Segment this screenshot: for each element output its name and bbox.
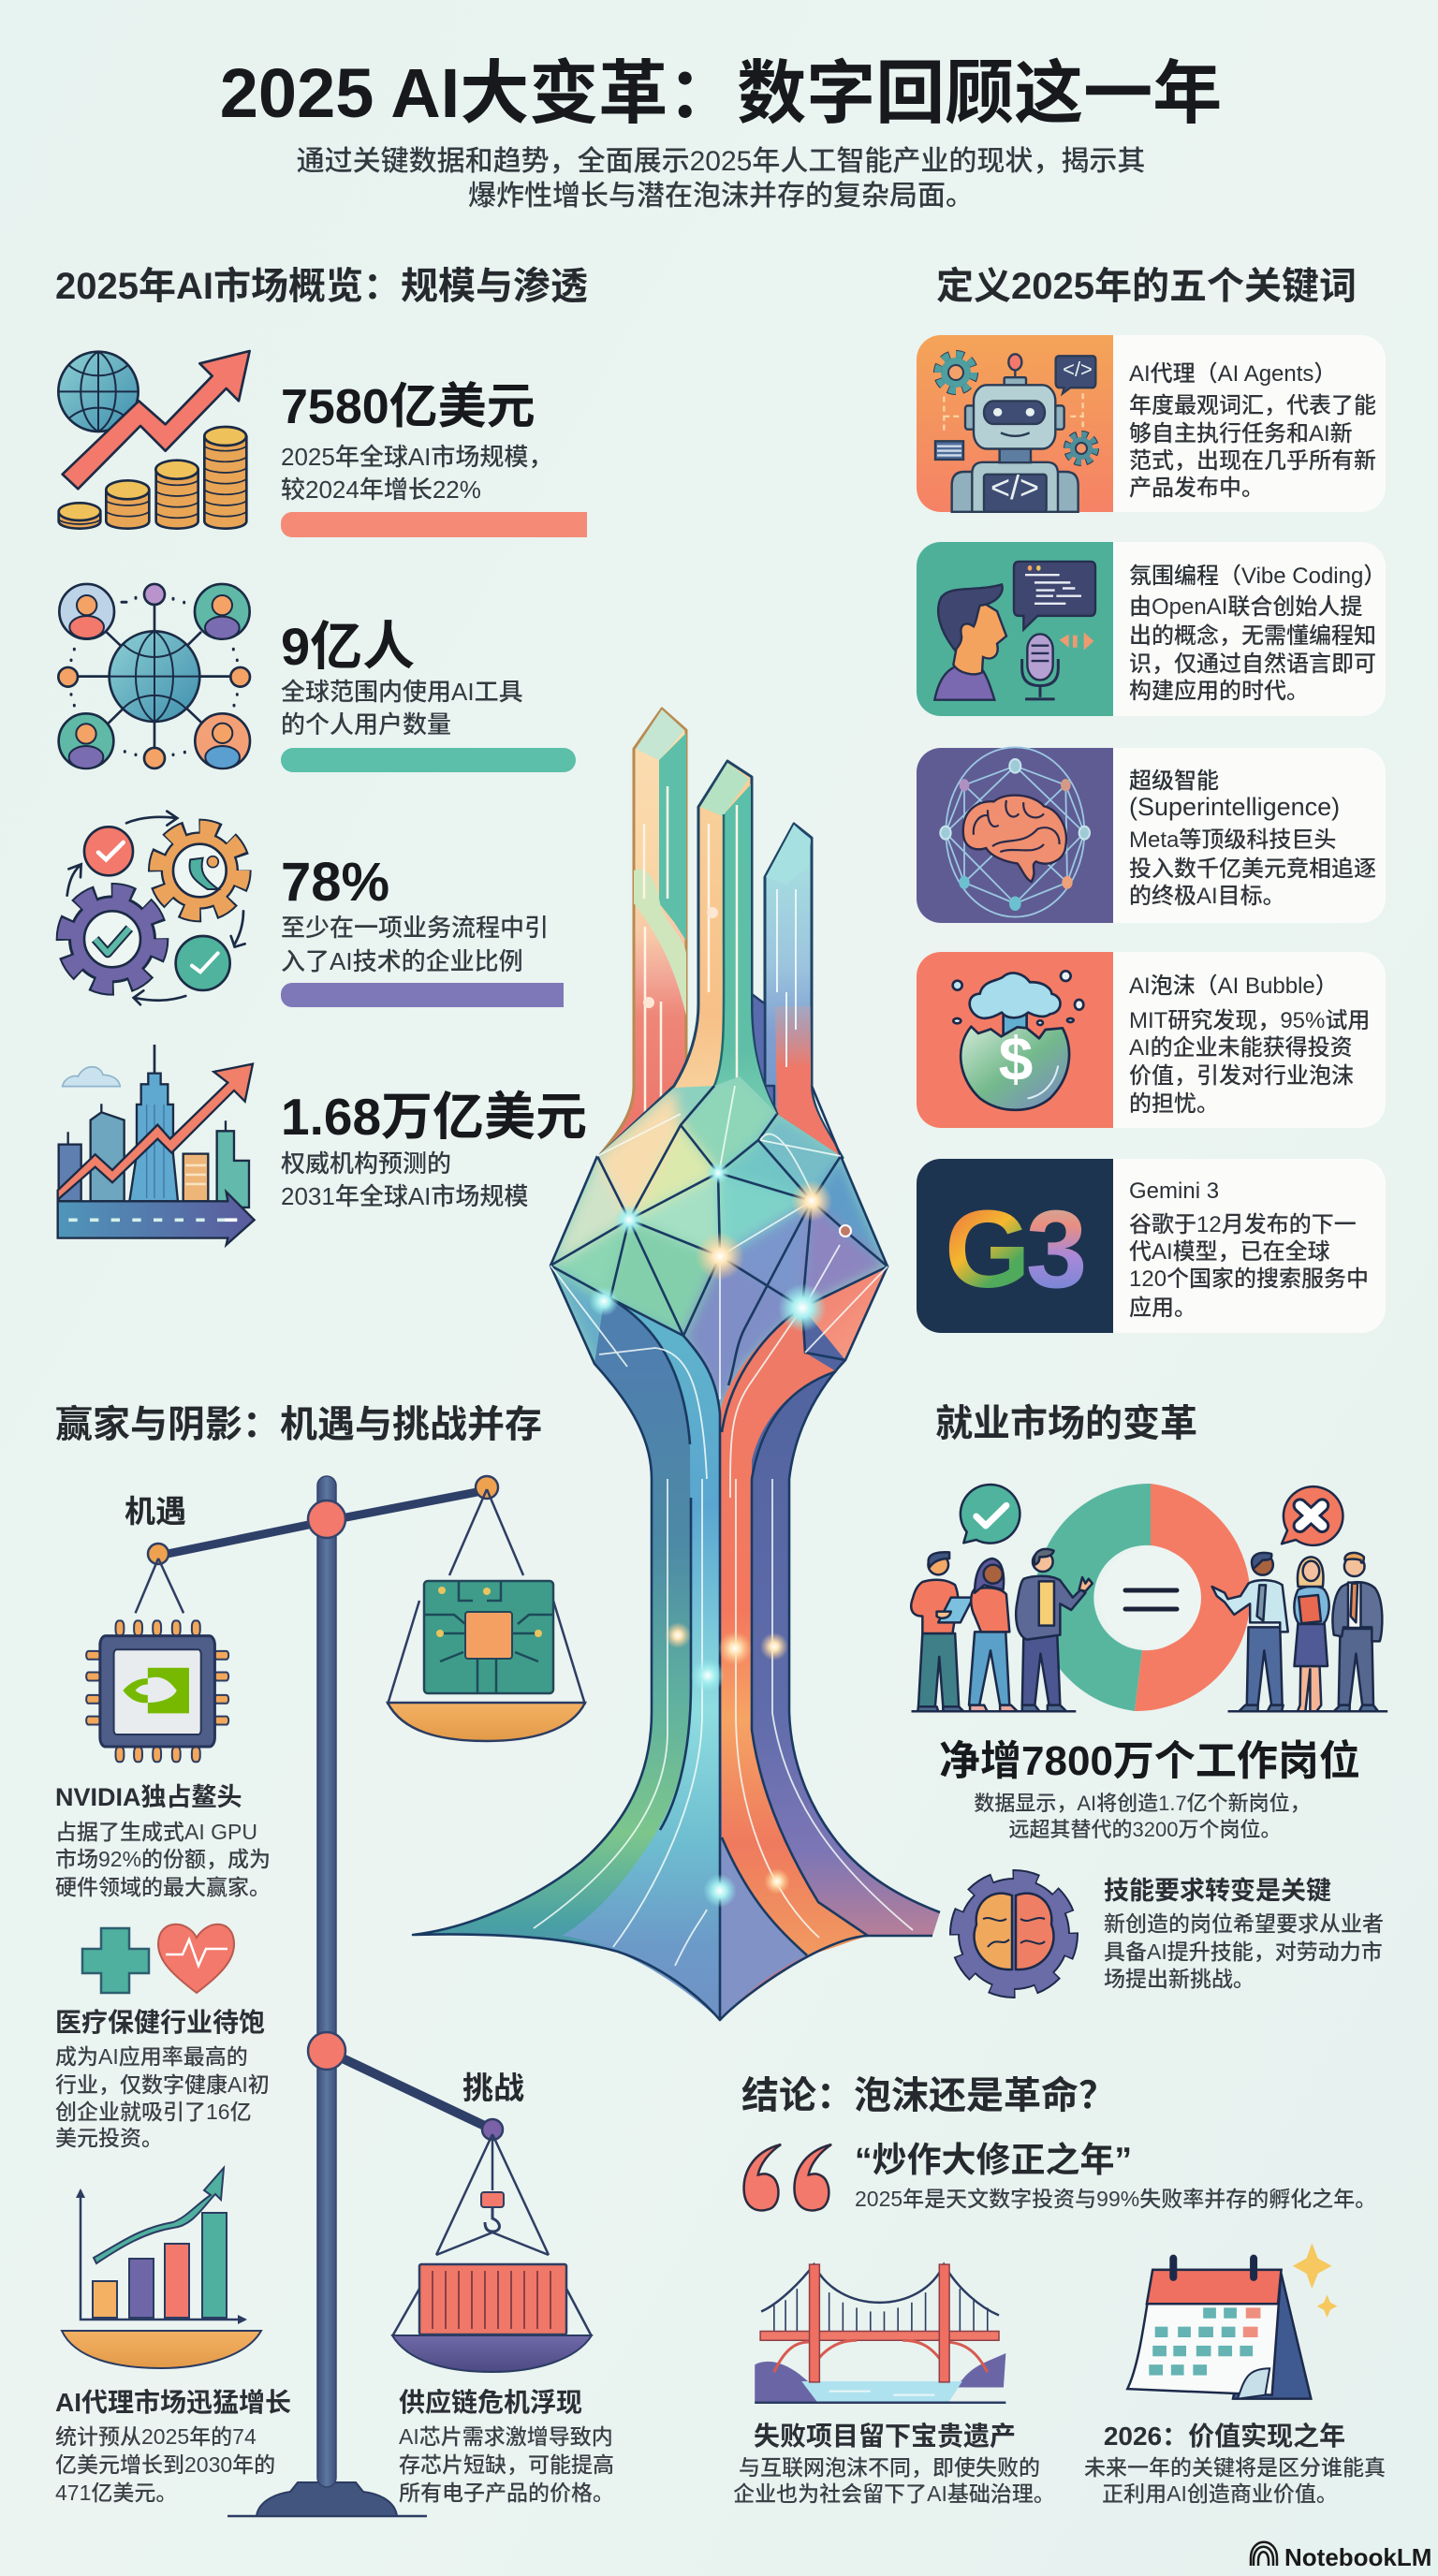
text: Vibe Coding: 氛围编程（Vibe Coding） bbox=[1129, 564, 1386, 589]
stat: users: 9亿人 bbox=[281, 617, 415, 676]
heading: five keywords: 定义2025年的五个关键词 bbox=[936, 266, 1357, 307]
text: skills bbox=[1104, 1877, 1384, 1991]
text: 2026: 正利用AI创造商业价值。 bbox=[1102, 2481, 1338, 2506]
text: Superintelligence bbox=[1129, 768, 1376, 909]
text: healthcare bbox=[55, 2008, 270, 2150]
text: AI Bubble: 的担忧。 bbox=[1129, 1091, 1219, 1117]
text: supply chain: AI芯片需求激增导致内 bbox=[399, 2424, 613, 2449]
label: opportunity: 机遇 bbox=[125, 1494, 186, 1529]
text: AI agent market: 亿美元增长到2030年的 bbox=[55, 2452, 275, 2477]
stat: enterprise adoption: 入了AI技术的企业比例 bbox=[281, 947, 523, 975]
text: healthcare: 行业，仅数字健康AI初 bbox=[55, 2072, 270, 2097]
heading: conclusion: 结论：泡沫还是革命？ bbox=[741, 2075, 1116, 2116]
icon: robot bbox=[935, 354, 1095, 512]
text: jobs detail: 数据显示，AI将创造1.7亿个新岗位， bbox=[974, 1792, 1311, 1815]
text: NVIDIA: 市场92%的份额，成为 bbox=[55, 1847, 271, 1871]
text: AI Bubble: AI的企业未能获得投资 bbox=[1129, 1035, 1353, 1061]
subtitle: 通过关键数据和趋势，全面展示2025年人工智能产业的现状，揭示其 bbox=[297, 146, 1145, 177]
icon: gears and checks bbox=[66, 812, 245, 1004]
stat: market size: 7580亿美元 bbox=[281, 380, 536, 434]
panel: keywords bbox=[917, 335, 1386, 1333]
text: AI Agents: 产品发布中。 bbox=[1129, 476, 1264, 501]
stat: net jobs: 净增7800万个工作岗位 bbox=[939, 1738, 1360, 1784]
text: quote bbox=[855, 2141, 1376, 2211]
stat: users bbox=[281, 617, 576, 772]
right spire bbox=[752, 824, 843, 1158]
stat: market size: 较2024年增长22% bbox=[281, 476, 481, 504]
left spire bbox=[599, 709, 686, 1156]
text: Superintelligence: 的终极AI目标。 bbox=[1129, 884, 1285, 909]
icon: container on pan bbox=[392, 2134, 592, 2372]
stat: users: 的个人用户数量 bbox=[281, 710, 451, 739]
text: AI agent market bbox=[55, 2388, 291, 2505]
light lines and glowing nodes bbox=[534, 1086, 913, 1966]
stat: 2031 forecast: 2031年全球AI市场规模 bbox=[281, 1182, 528, 1210]
text: Superintelligence: 投入数千亿美元竞相追逐 bbox=[1129, 856, 1376, 882]
text: Gemini 3: 应用。 bbox=[1129, 1295, 1196, 1321]
text: Gemini 3: Gemini 3 bbox=[1129, 1178, 1219, 1204]
icon: code glyphs on robot: </> bbox=[1063, 358, 1093, 381]
text: AI agent market: 统计预从2025年的74 bbox=[55, 2424, 257, 2449]
text: AI Bubble: AI泡沫（AI Bubble） bbox=[1129, 973, 1338, 999]
heading: winners and shadows: 赢家与阴影：机遇与挑战并存 bbox=[55, 1404, 542, 1445]
icon: person speaking to microphone bbox=[934, 562, 1095, 700]
icon: code glyphs on robot bbox=[990, 358, 1093, 506]
text: failed projects: 与互联网泡沫不同，即使失败的 bbox=[739, 2455, 1040, 2480]
icon: people right group with cross bubble bbox=[1212, 1486, 1387, 1711]
icon: city and rising arrow bbox=[58, 1045, 255, 1245]
text: AI Agents: 范式，出现在几乎所有新 bbox=[1129, 448, 1376, 474]
chart: donut bbox=[1035, 1484, 1250, 1711]
title: 2025 AI大变革：数字回顾这一年 bbox=[220, 54, 1222, 132]
stat: users: 全球范围内使用AI工具 bbox=[281, 678, 523, 706]
label: challenge: 挑战 bbox=[462, 2071, 524, 2105]
text: NVIDIA bbox=[55, 1783, 271, 1899]
card: Superintelligence bbox=[917, 747, 1386, 923]
subtitle bbox=[297, 146, 1145, 212]
text: Vibe Coding: 构建应用的时代。 bbox=[1129, 679, 1309, 704]
heading: market overview: 2025年AI市场概览：规模与渗透 bbox=[55, 266, 588, 307]
panel: market overview stats bbox=[58, 351, 587, 1245]
stat: 2031 forecast: 1.68万亿美元 bbox=[281, 1088, 587, 1146]
icon: people left group with check bubble bbox=[911, 1485, 1093, 1711]
icon: NVIDIA chip bbox=[86, 1559, 228, 1762]
crystal outline and facet lines bbox=[413, 1086, 940, 2020]
text: AI Agents: 年度最观词汇，代表了能 bbox=[1129, 393, 1376, 418]
text: healthcare: 成为AI应用率最高的 bbox=[55, 2044, 248, 2069]
text: failed projects bbox=[733, 2422, 1055, 2506]
icon: dollar sign: $ bbox=[999, 1024, 1033, 1093]
icon: connected users around globe bbox=[58, 584, 250, 768]
text: Gemini 3: 代AI模型，已在全球 bbox=[1129, 1239, 1330, 1265]
icon: circuit board on right pan bbox=[388, 1489, 585, 1741]
icon: gear with brain bbox=[957, 1877, 1071, 1991]
text: skills: 技能要求转变是关键 bbox=[1104, 1877, 1331, 1905]
card: AI Bubble bbox=[917, 952, 1386, 1128]
card: AI Agents bbox=[917, 335, 1386, 512]
text: Superintelligence: 超级智能 bbox=[1129, 768, 1219, 794]
icon: medical cross and heart bbox=[82, 1925, 234, 1993]
panel: conclusion bbox=[733, 2075, 1386, 2506]
text: Gemini 3: 120个国家的搜索服务中 bbox=[1129, 1266, 1369, 1292]
heading: jobs: 就业市场的变革 bbox=[935, 1403, 1197, 1444]
text: supply chain: 供应链危机浮现 bbox=[399, 2388, 582, 2417]
icon: code glyphs on robot: </> bbox=[990, 468, 1039, 506]
text: NVIDIA: 占据了生成式AI GPU bbox=[55, 1820, 257, 1844]
stat: 2031 forecast bbox=[281, 1088, 587, 1210]
stat: enterprise adoption: 78% bbox=[281, 852, 389, 913]
text: supply chain: 存芯片短缺，可能提高 bbox=[399, 2452, 614, 2477]
text: failed projects: 企业也为社会留下了AI基础治理。 bbox=[733, 2481, 1055, 2506]
text: 2026 bbox=[1084, 2422, 1386, 2506]
logo: NotebookLM: NotebookLM bbox=[1284, 2543, 1431, 2571]
text: AI Bubble: 价值，引发对行业泡沫 bbox=[1129, 1063, 1354, 1089]
text: AI Agents bbox=[1129, 361, 1376, 501]
icon: quotation marks bbox=[744, 2144, 831, 2210]
card: Vibe Coding bbox=[917, 542, 1386, 716]
text: jobs detail: 远超其替代的3200万个岗位。 bbox=[1009, 1818, 1281, 1841]
stat: market size bbox=[281, 380, 587, 537]
card: Gemini 3 bbox=[917, 1159, 1386, 1333]
text: Vibe Coding: 由OpenAI联合创始人提 bbox=[1129, 594, 1362, 620]
central crystal tower bbox=[413, 709, 940, 2020]
icon: cracked bubble and dollar bbox=[953, 971, 1083, 1110]
icon: bridge bbox=[755, 2264, 1005, 2403]
text: Superintelligence: (Superintelligence) bbox=[1129, 793, 1340, 821]
text: failed projects: 失败项目留下宝贵遗产 bbox=[754, 2422, 1016, 2451]
text: AI Agents: 够自主执行任务和AI新 bbox=[1129, 421, 1353, 446]
stat: enterprise adoption: 至少在一项业务流程中引 bbox=[281, 914, 549, 942]
text: jobs detail bbox=[974, 1792, 1311, 1841]
text: NVIDIA: 硬件领域的最大赢家。 bbox=[55, 1875, 271, 1899]
text: AI agent market: AI代理市场迅猛增长 bbox=[55, 2388, 291, 2417]
panel: jobs bbox=[911, 1484, 1387, 1991]
text: Superintelligence: Meta等顶级科技巨头 bbox=[1129, 827, 1336, 853]
text: supply chain bbox=[399, 2388, 614, 2505]
text: AI Bubble bbox=[1129, 973, 1370, 1117]
icon: G3 logo: G3 bbox=[945, 1188, 1084, 1311]
text: quote: 2025年是天文数字投资与99%失败率并存的孵化之年。 bbox=[855, 2187, 1376, 2211]
middle spire bbox=[599, 761, 777, 1173]
icon: brain in network bbox=[940, 747, 1090, 917]
text: skills: 场提出新挑战。 bbox=[1104, 1967, 1255, 1991]
text: 2026: 2026：价值实现之年 bbox=[1104, 2422, 1345, 2451]
icon: small gears bbox=[938, 354, 1095, 462]
stat: market size: 2025年全球AI市场规模， bbox=[281, 443, 552, 471]
scale stand bbox=[148, 1476, 503, 2516]
text: 2026: 未来一年的关键将是区分谁能真 bbox=[1084, 2455, 1386, 2480]
faceted diamond body bbox=[550, 1067, 888, 1413]
text: Gemini 3: 谷歌于12月发布的下一 bbox=[1129, 1212, 1357, 1237]
icon: calendar and sparkles bbox=[1127, 2243, 1337, 2399]
flowing stem bbox=[413, 1298, 940, 2020]
text: NVIDIA: NVIDIA独占鳌头 bbox=[55, 1783, 242, 1811]
text: Vibe Coding: 识，仅通过自然语言即可 bbox=[1129, 651, 1376, 677]
text: Gemini 3 bbox=[1129, 1178, 1369, 1321]
text: supply chain: 所有电子产品的价格。 bbox=[399, 2481, 614, 2505]
text: healthcare: 创企业就吸引了16亿 bbox=[55, 2100, 252, 2124]
text: AI Agents: AI代理（AI Agents） bbox=[1129, 361, 1336, 387]
text: AI agent market: 471亿美元。 bbox=[55, 2481, 177, 2505]
stat: enterprise adoption bbox=[281, 852, 564, 1007]
text: Vibe Coding: 出的概念，无需懂编程知 bbox=[1129, 622, 1376, 649]
text: AI Bubble: MIT研究发现，95%试用 bbox=[1129, 1008, 1370, 1033]
chart: AI agent market growth bbox=[62, 2168, 261, 2368]
text: skills: 具备AI提升技能，对劳动力市 bbox=[1104, 1939, 1383, 1964]
icon: globe, arrow and coins bbox=[58, 351, 250, 529]
text: skills: 新创造的岗位希望要求从业者 bbox=[1104, 1911, 1384, 1936]
subtitle: 爆炸性增长与潜在泡沫并存的复杂局面。 bbox=[468, 181, 974, 212]
stat: 2031 forecast: 权威机构预测的 bbox=[281, 1149, 451, 1178]
text: quote: “炒作大修正之年” bbox=[855, 2141, 1132, 2179]
text: healthcare: 美元投资。 bbox=[55, 2126, 163, 2150]
text: Vibe Coding bbox=[1129, 564, 1386, 704]
panel: opportunity and challenge scale bbox=[55, 1476, 614, 2516]
text: healthcare: 医疗保健行业待饱 bbox=[55, 2008, 265, 2037]
